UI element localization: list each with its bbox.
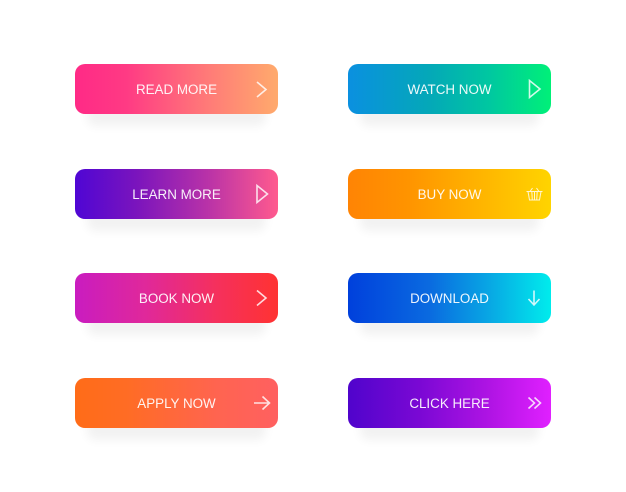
label: book now: BOOK NOW — [139, 291, 214, 306]
icon: chevron right — [256, 290, 268, 306]
icon: arrow right — [254, 396, 270, 410]
label: watch now: WATCH NOW — [407, 82, 492, 97]
icon: double chevron — [528, 396, 542, 410]
icon: play triangle — [528, 79, 542, 99]
icon: chevron right — [256, 82, 268, 98]
button: download — [348, 273, 551, 333]
button: click here — [348, 378, 551, 438]
label: learn more: LEARN MORE — [132, 187, 221, 202]
icon: basket — [526, 188, 542, 200]
button: book now — [75, 273, 278, 333]
label: read more: READ MORE — [136, 82, 217, 97]
icon: arrow down — [528, 290, 540, 306]
label: apply now: APPLY NOW — [137, 396, 216, 411]
button: apply now — [75, 378, 278, 438]
label: click here: CLICK HERE — [409, 396, 490, 411]
button: buy now — [348, 169, 551, 229]
button: learn more — [75, 169, 278, 229]
label: buy now: BUY NOW — [418, 187, 481, 202]
label: download: DOWNLOAD — [410, 291, 489, 306]
icon: play triangle — [256, 184, 269, 204]
button: read more — [75, 64, 278, 124]
button: watch now — [348, 64, 551, 124]
